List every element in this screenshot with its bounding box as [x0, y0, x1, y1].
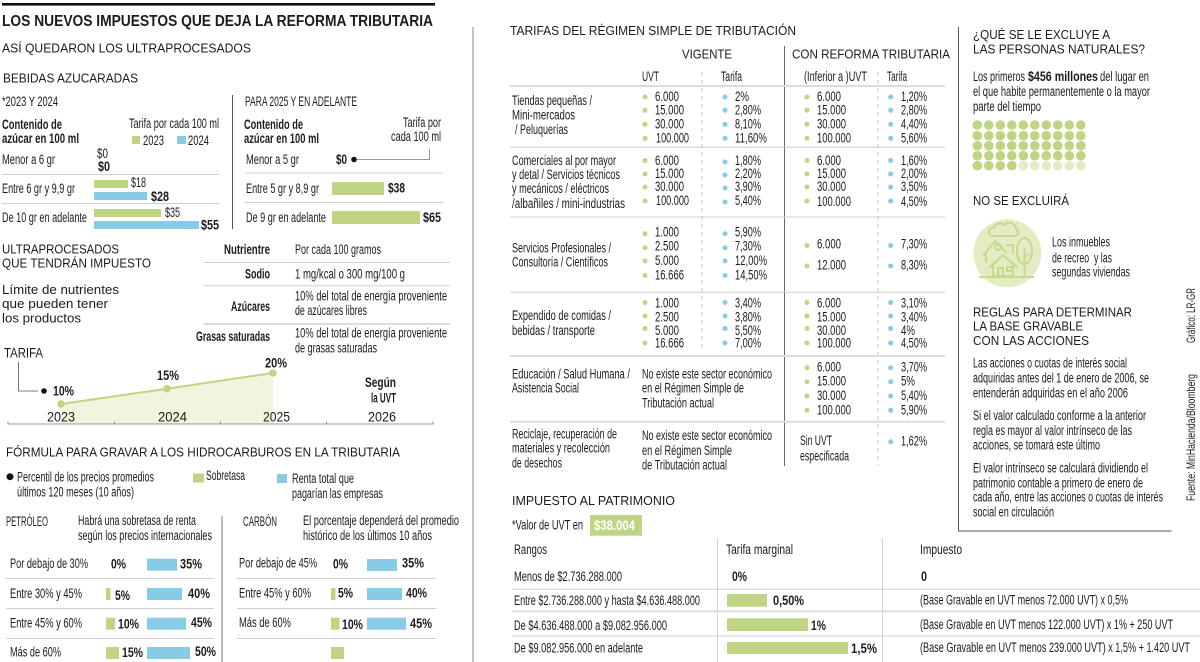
row entre 30% y 45%: 40%	[188, 586, 210, 601]
petroleo header: Habrá una sobretasa de renta	[78, 513, 196, 528]
row entre 6 y 9,9 gr: $18	[131, 175, 146, 190]
column headers: Tarifa	[887, 69, 907, 84]
row de 10 gr en adelante: De 10 gr en adelante	[2, 210, 87, 225]
row: reciclaje: especificada	[800, 449, 849, 464]
row: comerciales: y mecánicos / eléctricos	[512, 181, 609, 196]
row: educacion: 5,40%	[901, 388, 927, 403]
row header: Por cada 100 gramos	[295, 242, 381, 257]
row: expendido de comidas: 2.500	[655, 309, 679, 324]
text: 456 millones	[973, 69, 1150, 114]
title: LOS NUEVOS IMPUESTOS QUE DEJA LA REFORMA TRIBUTARIA	[2, 13, 433, 30]
row: servicios profesionales: 14,50%	[735, 267, 767, 282]
heading: que se excluye	[973, 27, 1145, 56]
row: expendido de comidas: 3,40%	[735, 295, 761, 310]
row: tiendas: / Peluquerías	[515, 122, 568, 137]
row grasas saturadas: Grasas saturadas	[196, 329, 270, 344]
text: regla 3: social en circulación	[973, 505, 1054, 520]
column header contenido	[244, 117, 319, 146]
row entre 30% y 45%: Entre 30% y 45%	[10, 586, 82, 601]
column header tarifa: cada 100 ml	[391, 129, 441, 144]
row: educacion: 6.000	[817, 360, 841, 375]
row de 9 gr en adelante: De 9 gr en adelante	[246, 210, 326, 225]
row entre 6 y 9,9 gr: $28	[151, 188, 169, 204]
text: 456 millones: $456 millones	[1028, 69, 1098, 84]
heading: ultraprocesados: ASÍ QUEDARON LOS ULTRAPROCESADOS	[2, 41, 251, 56]
row: reciclaje: materiales y recolección	[512, 441, 610, 456]
row menor a 6 gr: Menor a 6 gr	[2, 152, 55, 167]
heading: no se excluira: NO SE EXCLUIRÁ	[973, 193, 1069, 208]
row: reciclaje: 1,62%	[901, 434, 927, 449]
row: reciclaje: Reciclaje, recuperación de	[512, 426, 617, 441]
row: expendido de comidas: 6.000	[817, 295, 841, 310]
top rule	[2, 3, 435, 6]
row de 9.082 en adelante: De $9.082.956.000 en adelante	[514, 640, 643, 655]
text: inmuebles de recreo: segundas viviendas	[1052, 265, 1130, 280]
axis	[8, 422, 433, 424]
row: comerciales: 3,50%	[901, 179, 927, 194]
row: educacion: 5%	[901, 374, 915, 389]
row mas de 60%: Más de 60%	[10, 645, 61, 660]
legend: hidrocarburos: Sobretasa	[206, 468, 245, 483]
row grasas saturadas: 10% del total de energía proveniente	[295, 326, 447, 341]
header row: Tarifa marginal	[726, 542, 793, 557]
column headers: (Inferior a )UVT	[804, 69, 867, 84]
text: regla 2	[973, 408, 1146, 452]
credit: grafico: Gráfico: LR-GR	[1184, 288, 1198, 343]
row azucares: 10% del total de energía proveniente	[295, 289, 447, 304]
text: limite de nutrientes: Límite de nutrientes	[2, 282, 119, 297]
area	[61, 373, 273, 424]
heading: reglas base gravable	[973, 305, 1132, 348]
leader line	[357, 149, 430, 160]
text: regla 1: entenderán adquiridas en el año 2006	[973, 385, 1128, 400]
row: servicios profesionales: 16.666	[655, 267, 684, 282]
year labels: 2025	[263, 410, 290, 425]
row entre 2.736 y 4.636	[514, 593, 1128, 608]
row: expendido de comidas: 15.000	[817, 309, 846, 324]
row de 9 gr en adelante	[246, 209, 441, 225]
dot grid	[972, 120, 1086, 170]
row por debajo de 30%: Por debajo de 30%	[10, 556, 88, 571]
row: tiendas: 6.000	[655, 89, 679, 104]
column headers: Tarifa	[721, 69, 742, 84]
year labels: 2023	[47, 410, 75, 425]
row: expendido de comidas: 4,50%	[901, 335, 927, 350]
row: comerciales: /albañiles / mini-industrias	[512, 196, 625, 211]
text: 456 millones: Los primeros	[973, 69, 1025, 84]
row: expendido de comidas: 3,40%	[901, 309, 927, 324]
row: comerciales: 2,20%	[735, 166, 761, 181]
row de 10 gr en adelante: $35	[165, 205, 180, 220]
row: reciclaje: No existe este sector económico	[642, 428, 772, 443]
text: regla 1	[973, 356, 1149, 400]
column headers: UVT	[642, 69, 659, 84]
row: expendido de comidas: 1.000	[655, 295, 679, 310]
row: tiendas: 2,80%	[735, 102, 761, 117]
panel: petroleo	[6, 513, 216, 660]
data labels: 10%	[53, 384, 74, 399]
row: servicios profesionales: 2.500	[655, 239, 679, 254]
group headers	[682, 47, 950, 62]
row grasas saturadas	[196, 326, 447, 356]
row: comerciales: 6.000	[655, 153, 679, 168]
row: tiendas: 100.000	[817, 130, 851, 145]
row entre 5 y 8,9 gr: $38	[388, 180, 405, 196]
row entre 5 y 8,9 gr	[246, 180, 405, 196]
row por debajo de 30%	[10, 556, 202, 572]
legend: 2023	[143, 133, 164, 148]
row: comerciales: 2,00%	[901, 166, 927, 181]
panel: bebidas 2025 en adelante	[244, 94, 443, 225]
row menor a 6 gr: $0	[98, 159, 110, 174]
column header contenido: azúcar en 100 ml	[2, 131, 79, 146]
data labels: la UVT	[371, 391, 396, 406]
heading: ultraprocesados que tendran impuesto: ULTRAPROCESADOS	[2, 242, 119, 257]
row: comerciales	[512, 153, 927, 211]
row: comerciales: 15.000	[655, 166, 684, 181]
year labels: 2024	[158, 410, 187, 425]
row sodio: 1 mg/kcal o 300 mg/100 g	[295, 267, 405, 282]
text: limite de nutrientes: que pueden tener	[2, 296, 109, 311]
row: servicios profesionales: 12.000	[817, 257, 846, 272]
petroleo header: PETRÓLEO	[6, 514, 48, 529]
credit: fuente: Fuente: MinHacienda/Bloomberg	[1184, 374, 1198, 501]
data labels: 15%	[157, 368, 179, 383]
row: comerciales: 30.000	[817, 179, 846, 194]
row: expendido de comidas: 30.000	[817, 323, 846, 338]
column header tarifa: Tarifa por	[403, 115, 441, 130]
row entre 45% y 60%: 10%	[118, 617, 139, 632]
row entre 5 y 8,9 gr: Entre 5 gr y 8,9 gr	[246, 181, 319, 196]
row entre 45% y 60%: 40%	[406, 586, 427, 600]
petroleo header	[6, 513, 212, 543]
row mas de 60%: Más de 60%	[239, 615, 291, 630]
chart label tarifa: TARIFA	[4, 346, 43, 361]
row: educacion: Asistencia Social	[512, 381, 579, 396]
row: reciclaje: de Tributación actual	[642, 457, 727, 472]
row menor a 6 gr	[2, 146, 110, 174]
heading: reglas base gravable: REGLAS PARA DETERMINAR	[973, 305, 1132, 320]
header row: Rangos	[514, 542, 547, 557]
header row	[514, 542, 962, 557]
row: educacion: en el Régimen Simple de	[642, 381, 744, 396]
row: educacion: 30.000	[817, 388, 846, 403]
row: reciclaje: Sin UVT	[800, 433, 832, 448]
carbon header: CARBÓN	[243, 514, 277, 529]
row: comerciales: 6.000	[817, 153, 841, 168]
row: comerciales: Comerciales al por mayor	[512, 153, 616, 168]
row: servicios profesionales	[512, 225, 927, 282]
row: expendido de comidas	[512, 295, 927, 350]
row de 10 gr en adelante: $55	[201, 216, 219, 232]
row header	[224, 242, 381, 257]
row menor a 6 gr: $0	[97, 146, 108, 161]
row mas de 60%: 45%	[410, 616, 432, 631]
table: nutrientes	[196, 242, 450, 356]
petroleo header: según los precios internacionales	[78, 528, 212, 543]
subheading 2023 y 2024: *2023 Y 2024	[2, 94, 58, 109]
row mas de 60%	[239, 615, 432, 632]
panel: personas naturales box	[958, 27, 1172, 531]
row entre 2.736 y 4.636: Entre $2.736.288.000 y hasta $4.636.488.000	[514, 593, 700, 608]
row mas de 60%: 50%	[195, 644, 216, 659]
row: comerciales: 3,90%	[735, 179, 761, 194]
row: servicios profesionales: 7,30%	[901, 236, 927, 251]
row: comerciales: 5,40%	[735, 193, 761, 208]
row: servicios profesionales: 5,90%	[735, 225, 761, 240]
row: servicios profesionales: 1.000	[655, 225, 679, 240]
row entre 2.736 y 4.636: 0,50%	[773, 593, 804, 608]
row: educacion: Tributación actual	[642, 396, 714, 411]
callout: valor de uvt: $38.004	[594, 518, 635, 533]
row: tiendas: 30.000	[655, 116, 684, 131]
text: 456 millones: del lugar en	[1100, 69, 1149, 84]
row: comerciales: 30.000	[655, 179, 684, 194]
row mas de 60%: 15%	[122, 645, 143, 660]
subheading 2025: PARA 2025 Y EN ADELANTE	[245, 94, 357, 109]
heading: formula hidrocarburos: FÓRMULA PARA GRAVAR A LOS HIDROCARBUROS EN LA TRIBUTARIA	[6, 445, 400, 460]
row entre 45% y 60%: Entre 45% y 60%	[10, 615, 82, 630]
row: tiendas: 6.000	[817, 89, 841, 104]
row: tiendas: 8,10%	[735, 116, 761, 131]
row: servicios profesionales: Servicios Profesionales /	[512, 240, 611, 255]
heading: impuesto al patrimonio: IMPUESTO AL PATRIMONIO	[512, 493, 675, 508]
row: comerciales: 1,80%	[735, 153, 761, 168]
row por debajo de 30%: 0%	[111, 557, 126, 572]
row: servicios profesionales: 6.000	[817, 236, 841, 251]
row azucares: de azúcares libres	[295, 303, 367, 318]
row de 9 gr en adelante: $65	[423, 209, 441, 225]
column header contenido: azúcar en 100 ml	[244, 131, 319, 146]
column header contenido: Contenido de	[244, 117, 303, 132]
row: tiendas: Tiendas pequeñas /	[512, 93, 592, 108]
row: expendido de comidas: bebidas / transporte	[512, 323, 595, 338]
row: expendido de comidas: 5,50%	[735, 323, 761, 338]
row: educacion: 3,70%	[901, 360, 927, 375]
row de 9.082 en adelante	[514, 640, 1190, 656]
row: tiendas: Mini-mercados	[512, 107, 575, 122]
group headers: VIGENTE	[682, 47, 732, 62]
row: reciclaje	[512, 426, 927, 472]
text: inmuebles de recreo	[1052, 235, 1130, 280]
row azucares: Azúcares	[231, 299, 270, 314]
row: servicios profesionales: 8,30%	[901, 257, 927, 272]
row menos de 2.736	[514, 569, 927, 584]
column headers	[642, 69, 907, 84]
heading: regimen simple: TARIFAS DEL RÉGIMEN SIMPLE DE TRIBUTACIÓN	[510, 23, 796, 38]
row entre 45% y 60%: 45%	[191, 615, 212, 630]
row header: Nutrientre	[224, 242, 270, 257]
row menor a 5 gr	[246, 152, 357, 167]
heading: ultraprocesados que tendran impuesto: QUE TENDRÁN IMPUESTO	[2, 256, 151, 271]
heading: ultraprocesados que tendran impuesto	[2, 242, 151, 271]
callout: valor de uvt: *Valor de UVT en	[512, 517, 583, 532]
row entre 45% y 60%: Entre 45% y 60%	[239, 586, 311, 601]
row: educacion	[512, 360, 927, 417]
row: servicios profesionales: 7,30%	[735, 239, 761, 254]
row: tiendas: 4,40%	[901, 116, 927, 131]
data labels: Según	[365, 375, 396, 390]
legend: 2024	[188, 133, 209, 148]
row: expendido de comidas: Expendido de comidas /	[512, 308, 611, 323]
row entre 45% y 60%	[10, 615, 212, 632]
row: tiendas	[512, 89, 927, 145]
row: comerciales: y detal / Servicios técnicos	[512, 167, 620, 182]
legend: hidrocarburos: Percentil de los precios promedios	[17, 470, 154, 485]
row de 10 gr en adelante	[2, 205, 219, 232]
row: servicios profesionales: 12,00%	[735, 253, 767, 268]
row entre 45% y 60%	[239, 586, 427, 601]
panel: carbon	[237, 513, 459, 659]
legend	[132, 133, 209, 148]
row menor a 5 gr: Menor a 5 gr	[246, 152, 299, 167]
row: comerciales: 100.000	[817, 194, 851, 209]
row: reciclaje: en el Régimen Simple	[642, 443, 732, 458]
row menos de 2.736: 0	[921, 569, 927, 584]
text: inmuebles de recreo: de recreo y las	[1052, 250, 1112, 265]
row grasas saturadas: de grasas saturadas	[295, 341, 377, 356]
row: comerciales: 100.000	[656, 193, 689, 208]
year labels	[47, 410, 396, 425]
row: comerciales: 1,60%	[901, 153, 927, 168]
row de 4.636 a 9.082: De $4.636.488.000 a $9.082.956.000	[514, 618, 667, 633]
line series	[61, 373, 273, 404]
row: tiendas: 5,60%	[901, 130, 927, 145]
row: expendido de comidas: 5.000	[655, 323, 679, 338]
row: tiendas: 15.000	[655, 102, 684, 117]
row entre 6 y 9,9 gr	[2, 175, 169, 204]
heading: reglas base gravable: LA BASE GRAVABLE	[973, 319, 1083, 334]
text: limite de nutrientes: los productos	[2, 311, 82, 326]
panel: bebidas 2023 y 2024	[2, 94, 219, 232]
group headers: CON REFORMA TRIBUTARIA	[792, 47, 950, 62]
row sodio	[245, 267, 405, 282]
header row: Impuesto	[920, 542, 962, 557]
row: tiendas: 11,60%	[735, 130, 767, 145]
row por debajo de 45%: 0%	[333, 557, 348, 572]
column header contenido	[2, 117, 79, 146]
text: regla 2: acciones, se tomará este último	[973, 437, 1100, 452]
row mas de 60%	[10, 644, 216, 660]
heading: que se excluye: ¿QUÉ SE LE EXCLUYE A	[973, 27, 1110, 42]
row: comerciales: 4,50%	[901, 194, 927, 209]
heading: que se excluye: LAS PERSONAS NATURALES?	[973, 41, 1145, 56]
row menos de 2.736: 0%	[732, 569, 747, 584]
carbon header	[243, 513, 459, 543]
callout: valor de uvt	[512, 515, 642, 536]
column header tarifa: Tarifa por cada 100 ml	[129, 116, 219, 131]
row: tiendas: 30.000	[817, 116, 846, 131]
legend: hidrocarburos: últimos 120 meses (10 años)	[17, 485, 134, 500]
row: educacion: No existe este sector económico	[642, 366, 772, 381]
row: tiendas: 15.000	[817, 102, 846, 117]
text: regla 3	[973, 461, 1163, 520]
row: tiendas: 100.000	[656, 130, 689, 145]
row: educacion: Educación / Salud Humana /	[512, 366, 630, 381]
heading: reglas base gravable: CON LAS ACCIONES	[973, 333, 1089, 348]
row: expendido de comidas: 7,00%	[735, 335, 761, 350]
text: inmuebles de recreo: Los inmuebles	[1052, 235, 1110, 250]
text: limite de nutrientes	[2, 282, 119, 326]
table: regimen simple	[510, 46, 950, 472]
text: 456 millones: parte del tiempo	[973, 99, 1041, 114]
row entre 6 y 9,9 gr: Entre 6 gr y 9,9 gr	[2, 181, 75, 196]
data labels: 20%	[265, 356, 287, 371]
row: expendido de comidas: 4%	[901, 323, 915, 338]
legend: hidrocarburos	[6, 468, 383, 501]
row de 4.636 a 9.082	[514, 617, 1173, 633]
table: impuesto al patrimonio	[512, 538, 1200, 662]
row de 4.636 a 9.082: 1%	[811, 618, 826, 633]
row de 9.082 en adelante: 1,5%	[851, 641, 877, 656]
carbon header: El porcentaje dependerá del promedio	[303, 513, 459, 528]
row: expendido de comidas: 100.000	[817, 335, 851, 350]
row: tiendas: 1,20%	[901, 89, 927, 104]
row entre 30% y 45%	[10, 586, 210, 603]
row por debajo de 45%	[239, 556, 424, 572]
column header tarifa	[391, 115, 441, 144]
row por debajo de 45%: Por debajo de 45%	[239, 556, 317, 571]
chart: tarifa por año	[4, 346, 433, 425]
row: comerciales: 15.000	[817, 166, 846, 181]
row por debajo de 45%: 35%	[402, 556, 424, 570]
legend: hidrocarburos: Renta total que	[292, 471, 354, 486]
row sodio: Sodio	[245, 267, 270, 282]
row: servicios profesionales: Consultoría / Científicos	[512, 255, 608, 270]
row: servicios profesionales: 5.000	[655, 253, 679, 268]
row por debajo de 30%: 35%	[180, 557, 202, 572]
row entre 45% y 60%: 5%	[338, 586, 353, 600]
row mas de 60%: 10%	[342, 617, 363, 632]
legend: hidrocarburos: pagarían las empresas	[292, 486, 383, 501]
row menor a 5 gr: $0	[336, 152, 347, 167]
row: tiendas: 2,80%	[901, 102, 927, 117]
row: educacion: 100.000	[817, 402, 851, 417]
row: educacion: 15.000	[817, 374, 846, 389]
row: expendido de comidas: 3,80%	[735, 309, 761, 324]
icon: house and tree	[973, 219, 1041, 287]
row menos de 2.736: Menos de $2.736.288.000	[514, 569, 622, 584]
year labels: 2026	[368, 410, 396, 425]
column header contenido: Contenido de	[2, 117, 62, 132]
row: tiendas: 2%	[735, 89, 749, 104]
row: reciclaje: de desechos	[512, 455, 562, 470]
row: expendido de comidas: 3,10%	[901, 295, 927, 310]
carbon header: histórico de los últimos 10 años	[303, 528, 432, 543]
row: expendido de comidas: 16.666	[655, 335, 684, 350]
row azucares	[231, 289, 447, 318]
row entre 30% y 45%: 5%	[115, 588, 130, 603]
row: educacion: 5,90%	[901, 402, 927, 417]
stray green bar	[331, 647, 344, 659]
data labels	[53, 356, 396, 406]
heading: bebidas azucaradas: BEBIDAS AZUCARADAS	[3, 71, 138, 86]
